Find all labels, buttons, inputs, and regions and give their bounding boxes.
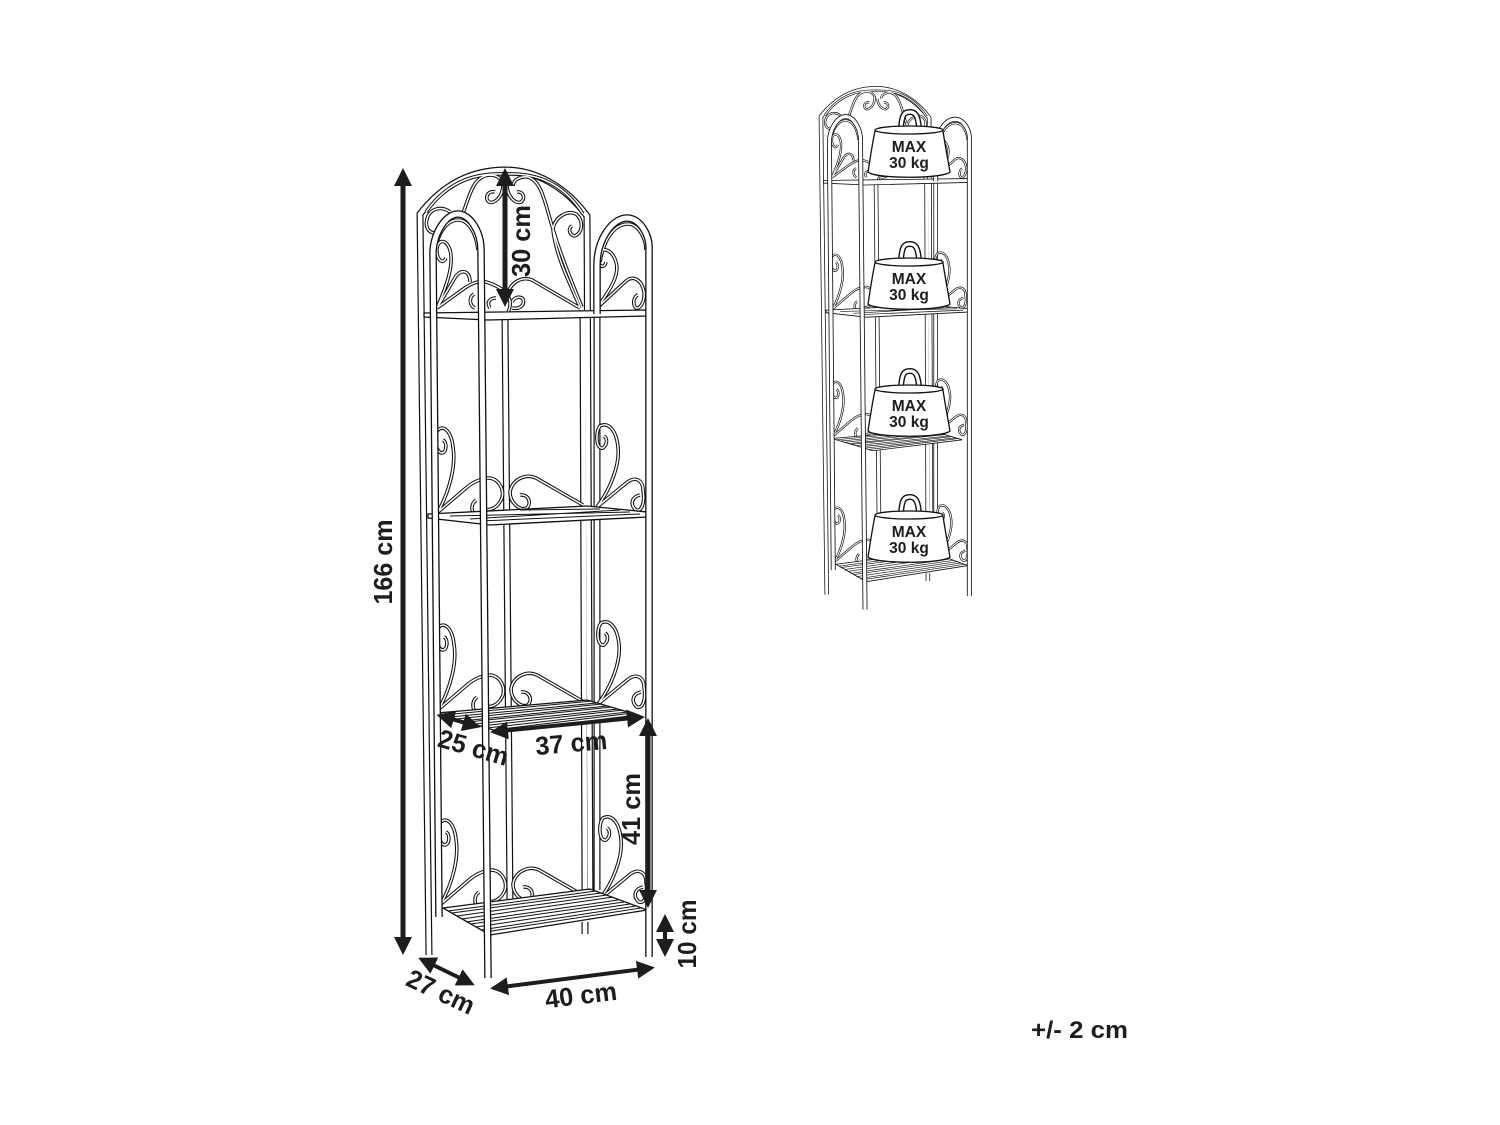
dimension: shelf width 37 cm: 37 cm (534, 725, 608, 761)
weight label: second shelf (868, 244, 950, 309)
weight label: bottom shelf (868, 497, 950, 562)
weight label: third shelf (868, 371, 950, 436)
dimension: overall width 40 cm (502, 969, 643, 1014)
dimension: overall depth 27 cm: 27 cm (402, 963, 480, 1021)
weight label: third shelf: MAX (892, 398, 927, 415)
weight label: second shelf: 30 kg (889, 287, 929, 304)
weight label: top shelf (868, 112, 950, 177)
weight label: second shelf: MAX (892, 271, 927, 288)
dimension: total height 166 cm: 166 cm (368, 520, 398, 604)
weight label: bottom shelf: 30 kg (889, 540, 929, 557)
weight label: top shelf: 30 kg (889, 155, 929, 172)
small shelf unit drawing (821, 88, 969, 609)
large shelf unit drawing (420, 170, 649, 978)
dimension: top section 30 cm (505, 180, 536, 295)
dimension: top section 30 cm: 30 cm (506, 205, 536, 277)
weight label: bottom shelf: MAX (892, 524, 927, 541)
tolerance note: +/- 2 cm (1031, 1017, 1128, 1044)
dimension: shelf width 37 cm (502, 718, 633, 761)
dimension: overall width 40 cm: 40 cm (543, 976, 618, 1014)
dimension: shelf depth 25 cm: 25 cm (435, 723, 512, 772)
weight label: third shelf: 30 kg (889, 414, 929, 431)
dimension: leg height 10 cm: 10 cm (672, 900, 702, 968)
weight label: top shelf: MAX (892, 139, 927, 156)
dimension: shelf spacing 41 cm: 41 cm (616, 773, 646, 845)
